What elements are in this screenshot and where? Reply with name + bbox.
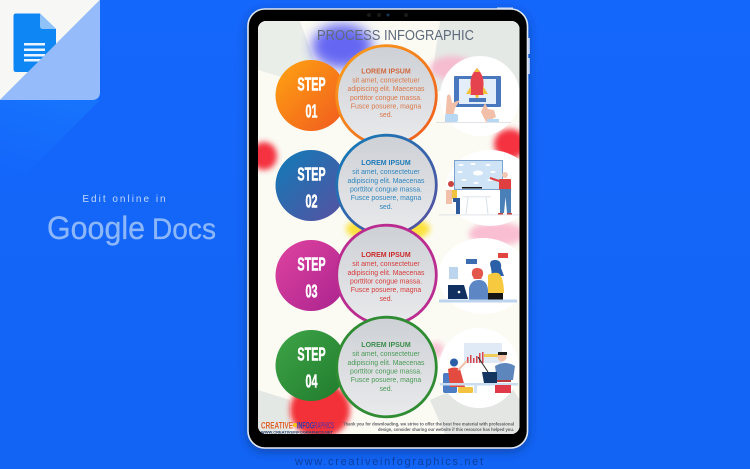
step 03 ring and text xyxy=(337,225,436,325)
illustration backdrops xyxy=(440,56,520,136)
panel: step 02 xyxy=(276,135,519,235)
logo: Creative Infographics: CREATIVE xyxy=(261,420,293,432)
panel: step 03 xyxy=(276,225,517,325)
step 01 badge: 01 xyxy=(305,102,318,122)
step 03 badge: 03 xyxy=(305,282,318,302)
logo text: Google Docs: Google xyxy=(47,210,145,246)
step 04 ring and text: adipiscing elit. Maecenas xyxy=(348,360,425,367)
step 03 badge: STEP xyxy=(297,255,326,275)
illustration: tablet with rocket xyxy=(436,68,511,123)
logo text: Google Docs xyxy=(47,210,216,246)
tablet: RAPHICS xyxy=(314,420,334,432)
step 01 ring and text: LOREM IPSUM xyxy=(361,68,411,76)
step 04 ring and text: porttitor congue massa. xyxy=(350,368,422,376)
step 01 badge xyxy=(276,60,346,131)
title: PROCESS INFOGRAPHIC xyxy=(317,28,474,44)
screen xyxy=(251,21,534,438)
step 02 ring and text: adipiscing elit. Maecenas xyxy=(348,178,425,185)
step 02 badge: 02 xyxy=(305,192,318,212)
step 01 ring and text: Fusce posuere, magna xyxy=(351,104,421,110)
tablet body xyxy=(248,9,528,448)
step 01 ring and text: sit amet, consectetuer xyxy=(352,78,420,84)
footer note: design, consider sharing our website if this resource has helped you. xyxy=(378,427,514,432)
step 03 ring and text: Fusce posuere, magna xyxy=(351,287,421,294)
step 04 ring and text: Fusce posuere, magna xyxy=(351,377,421,384)
logo: Creative Infographics xyxy=(261,420,334,434)
illustration: two people at laptop xyxy=(439,253,517,302)
step 02 ring and text: sit amet, consectetuer xyxy=(352,169,420,176)
step 02 ring and text: porttitor congue massa. xyxy=(350,186,422,194)
step 03 ring and text: sit amet, consectetuer xyxy=(352,261,420,268)
step 04 ring and text: sit amet, consectetuer xyxy=(352,351,420,358)
step 02 badge: STEP xyxy=(297,165,326,185)
camera dots xyxy=(367,13,408,17)
step 03 ring and text: adipiscing elit. Maecenas xyxy=(348,270,425,277)
step 02 badge xyxy=(276,150,346,221)
step 01 ring and text: adipiscing elit. Maecenas xyxy=(348,86,425,93)
decorative soft shapes xyxy=(251,21,526,438)
step 02 ring and text: LOREM IPSUM xyxy=(361,160,411,167)
step 04 ring and text: sed. xyxy=(379,386,393,393)
step 01 ring and text: sed. xyxy=(379,112,393,119)
step 03 ring and text: porttitor congue massa. xyxy=(350,278,422,286)
step 04 ring and text: LOREM IPSUM xyxy=(361,342,411,349)
illustration: team reviewing chart xyxy=(440,343,518,393)
footer note xyxy=(343,422,514,432)
step 02 ring and text: sed. xyxy=(379,204,393,211)
step 04 badge: STEP xyxy=(297,345,326,365)
step 03 badge xyxy=(276,240,346,311)
step 04 badge xyxy=(276,330,346,401)
illustration: classroom presenter xyxy=(439,160,519,215)
panel: step 04 xyxy=(276,317,518,417)
logo text: Google Docs: Docs xyxy=(152,213,216,246)
tablet side buttons xyxy=(497,8,529,74)
website url: www.creativeinfographics.net xyxy=(294,456,483,468)
step 04 badge: 04 xyxy=(305,372,318,392)
caption: edit online in: Edit online in xyxy=(82,194,168,205)
step 03 ring and text: sed. xyxy=(379,296,393,303)
step 03 ring and text: LOREM IPSUM xyxy=(361,252,411,259)
panel: step 01 xyxy=(276,46,511,145)
step 01 badge: STEP xyxy=(297,75,326,95)
step 01 ring and text: porttitor congue massa. xyxy=(350,95,422,102)
logo: Creative Infographics: INFOG xyxy=(297,420,314,432)
tablet xyxy=(248,8,534,448)
footer note: Thank you for downloading, we strive to offer the best free material with professional xyxy=(343,422,514,426)
step 04 ring and text xyxy=(337,317,436,417)
step 02 ring and text xyxy=(337,135,436,235)
step 01 ring and text xyxy=(337,46,436,145)
icon: document xyxy=(14,14,56,72)
step 02 ring and text: Fusce posuere, magna xyxy=(351,195,421,202)
logo: Creative Infographics: WWW.CREATIVEINFOGRAPHICS.NET xyxy=(261,430,334,434)
folded corner with Google Docs icon xyxy=(0,0,100,133)
